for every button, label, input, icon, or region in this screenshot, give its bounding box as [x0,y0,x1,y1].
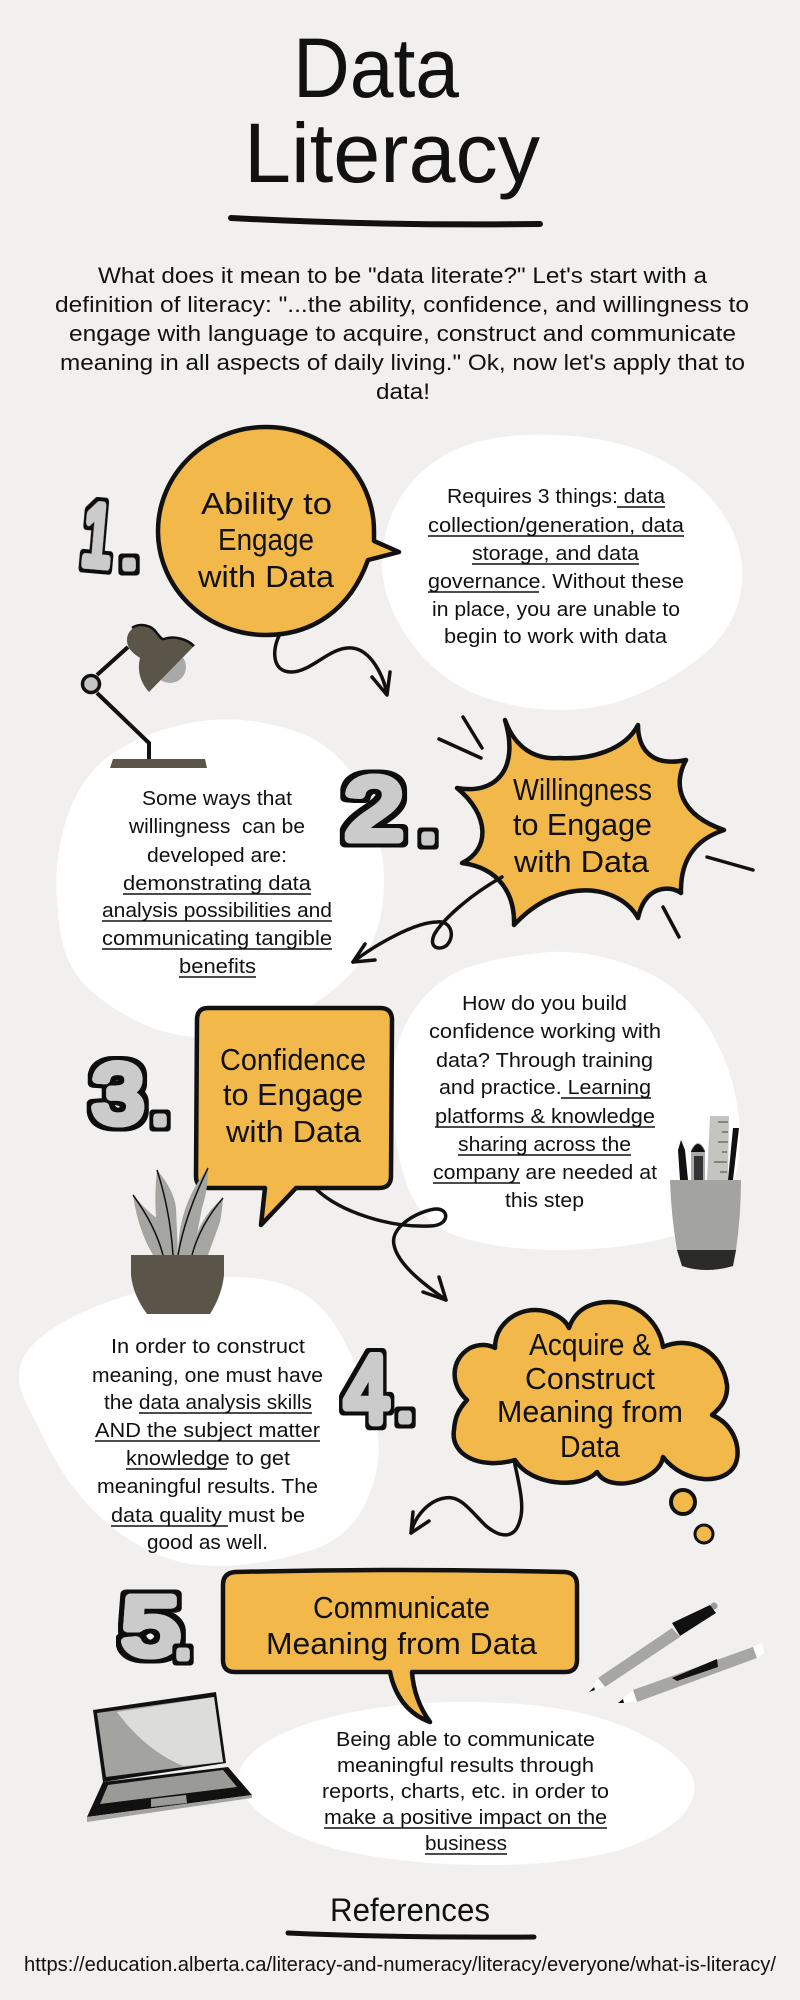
speech bubble: ability [158,427,399,635]
number 4: . [396,1361,414,1435]
speech bubble: ability: with Data [197,559,335,594]
title: Data [293,21,459,115]
number 2: . [419,782,437,856]
thought cloud: acquire and construct: Meaning from [497,1394,683,1429]
panel: step 2 description: analysis possibilities and [102,900,332,922]
panel: step 5 description: Being able to communicate [336,1729,595,1751]
title: Literacy [244,106,540,200]
number 3 [93,1048,169,1140]
panel: step 1 description: begin to work with data [444,626,668,648]
panel: step 3 description: confidence working with [429,1021,661,1043]
icon: laptop [87,1692,252,1822]
panel: step 5 description [239,1702,695,1865]
intro text block: data! [376,379,430,404]
speech bubble: confidence [196,1008,392,1225]
number 1: . [120,508,138,582]
reference link: https://education.alberta.ca/literacy-and-numeracy/literacy/everyone/what-is-literacy/ [24,1954,776,1976]
number 3: 3 [93,1048,143,1140]
number 5: 5 [123,1580,179,1672]
thought cloud: acquire and construct: Data [560,1429,621,1464]
starburst bubble: willingness: Willingness [513,772,652,807]
speech bubble: confidence: Confidence [220,1042,366,1077]
panel: step 4 description: meaningful results. The [97,1476,318,1498]
number 5: . [174,1598,192,1672]
speech bubble: confidence: with Data [225,1114,362,1149]
starburst bubble: willingness: with Data [513,844,650,879]
arrow: step 3 to 4 [316,1189,446,1300]
number 2: 2 [345,761,403,858]
burst rays [439,717,753,937]
panel: step 4 description: AND the subject matter [95,1420,320,1442]
thought cloud: acquire and construct: Construct [525,1361,655,1396]
panel: step 1 description: in place, you are unable to [432,599,680,621]
number 1: 1 [79,487,116,585]
panel: step 5 description: make a positive impact on the [324,1807,607,1829]
panel: step 2 description: developed are: [147,845,287,867]
icon: desk lamp [82,625,207,768]
panel: step 1 description: Requires 3 things: data [447,486,666,508]
panel: step 3 description: sharing across the [458,1134,631,1156]
panel: step 4 description: meaning, one must have [92,1365,323,1387]
panel: step 3 description [392,952,740,1250]
number 3: . [151,1064,169,1138]
thought cloud: acquire and construct [454,1302,738,1543]
panel: step 2 description [56,719,384,1037]
panel: step 4 description: knowledge to get [126,1448,290,1470]
arrow: step 4 to description [411,1460,522,1535]
panel: step 4 description: data quality must be [111,1505,305,1527]
panel: step 1 description: collection/generation, data [428,515,685,537]
thought cloud: acquire and construct: Acquire & [529,1327,651,1362]
panel: step 2 description: benefits [179,956,256,978]
number 4: 4 [345,1336,389,1442]
intro text block [55,263,749,404]
starburst bubble: willingness: to Engage [513,807,652,842]
speech bubble: ability: Ability to [201,486,332,521]
panel: step 3 description: and practice. Learning [439,1077,651,1099]
panel: step 4 description: good as well. [147,1532,268,1554]
intro text block: engage with language to acquire, construct and communicate [69,321,736,346]
panel: step 3 description: company are needed at [433,1162,657,1184]
panel: step 3 description: platforms & knowledge [435,1106,655,1128]
intro text block: meaning in all aspects of daily living." Ok, now let's apply that to [60,350,745,375]
panel: step 1 description [382,435,742,710]
panel: step 2 description: demonstrating data [123,873,312,895]
panel: step 3 description: How do you build [462,993,627,1015]
intro text block: definition of literacy: "...the ability, confidence, and willingness to [55,292,749,317]
starburst bubble: willingness [457,720,724,925]
icon: potted plant [131,1168,224,1314]
intro text block: What does it mean to be "data literate?" Let's start with a [98,263,708,288]
panel: step 5 description: reports, charts, etc. in order to [322,1781,609,1803]
arrow: step 1 to 2 [275,636,390,695]
panel: step 5 description: meaningful results through [337,1755,594,1777]
panel: step 2 description: willingness can be [128,816,305,838]
number 1 [79,487,138,585]
speech bubble: ability: Engage [218,522,314,557]
panel: step 1 description: storage, and data [472,543,640,565]
speech bubble: communicate: Meaning from Data [266,1626,538,1661]
arrow: step 2 to description [353,877,502,962]
number 2 [345,761,437,858]
panel: step 1 description: governance. Without these [428,571,684,593]
panel: step 2 description: Some ways that [142,788,292,810]
panel: step 3 description: data? Through training [436,1050,653,1072]
panel: step 5 description: business [425,1833,507,1855]
speech bubble: communicate: Communicate [313,1590,490,1625]
number 4 [345,1336,414,1442]
references heading [288,1892,534,1937]
references heading: References [330,1892,490,1928]
icon: pencil cup [670,1116,741,1270]
speech bubble: confidence: to Engage [223,1077,363,1112]
panel: step 4 description: the data analysis skills [104,1392,312,1414]
speech bubble: communicate [223,1570,577,1722]
panel: step 4 description: In order to construct [111,1336,305,1358]
title [231,21,540,224]
panel: step 3 description: this step [505,1190,584,1212]
panel: step 4 description [19,1277,379,1566]
icon: pens [589,1602,764,1703]
panel: step 2 description: communicating tangible [102,928,332,950]
